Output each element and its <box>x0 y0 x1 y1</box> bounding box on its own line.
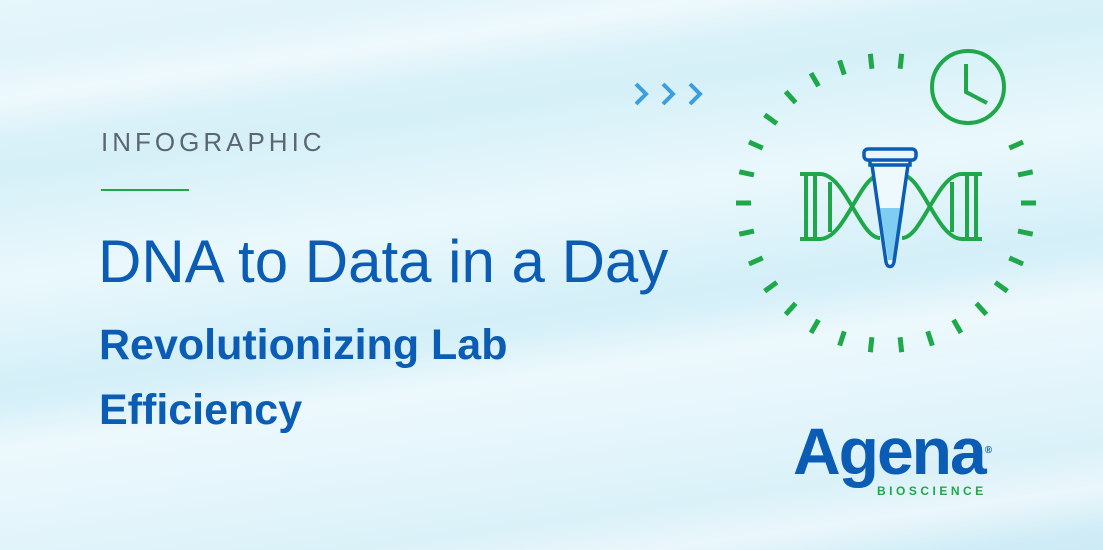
title: DNA to Data in a Day <box>98 228 668 295</box>
logo: Agena Bioscience: Agena® <box>793 414 992 488</box>
subtitle: Revolutionizing Lab <box>99 321 507 369</box>
heading: INFOGRAPHIC: INFOGRAPHIC <box>101 127 326 157</box>
logo: Agena Bioscience: BIOSCIENCE <box>877 484 987 498</box>
subtitle: Efficiency <box>99 386 302 434</box>
subtitle <box>99 321 507 434</box>
icon: chevrons <box>634 82 703 106</box>
